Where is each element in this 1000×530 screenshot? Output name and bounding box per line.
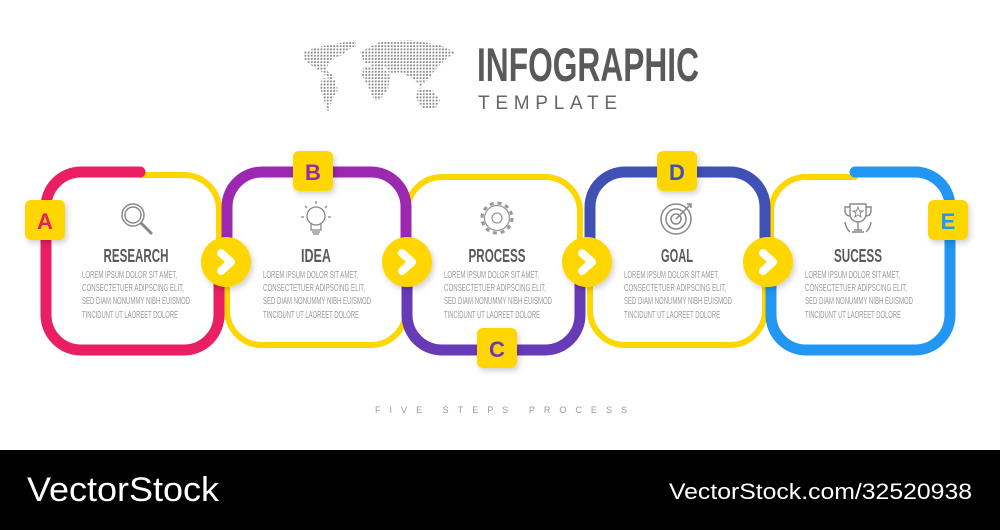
footer bar (0, 450, 1000, 530)
badge: A (25, 200, 65, 240)
text block: goal: GOAL (661, 246, 693, 266)
badge: E: E (941, 209, 955, 234)
panel: step frames (46, 172, 950, 350)
badge: C: C (489, 337, 505, 362)
badge: A: A (37, 209, 53, 234)
badge: C (477, 328, 517, 368)
text block: idea: IDEA (301, 246, 331, 266)
footer url: VectorStock.com/32520938 (669, 479, 972, 504)
text block: research (82, 246, 190, 321)
arrow: B to C (382, 237, 432, 287)
text block: research: SED DIAM NONUMMY NIBH EUISMOD (82, 296, 190, 307)
icon: gear (482, 203, 512, 233)
title: INFOGRAPHIC (477, 38, 699, 91)
icon: dotted world map (303, 40, 455, 112)
badge: D (657, 151, 697, 191)
text block: process (444, 246, 552, 321)
icon: target (661, 204, 691, 234)
arrow: D to E (743, 237, 793, 287)
text block: idea: CONSECTETUER ADIPSCING ELIT, (263, 283, 365, 294)
text block: sucess: TINCIDUNT UT LAOREET DOLORE (805, 310, 901, 321)
text block: sucess: SUCESS (834, 246, 882, 266)
text block: process: PROCESS (468, 246, 526, 266)
badge: B: B (305, 160, 321, 185)
text block: goal (624, 246, 732, 321)
icon: magnifier (122, 204, 152, 234)
text block: goal: LOREM IPSUM DOLOR SIT AMET, (624, 270, 719, 281)
arrow: C to D (562, 237, 612, 287)
text block: goal: CONSECTETUER ADIPSCING ELIT, (624, 283, 726, 294)
text block: idea: LOREM IPSUM DOLOR SIT AMET, (263, 270, 358, 281)
text block: sucess: CONSECTETUER ADIPSCING ELIT, (805, 283, 907, 294)
text block: process: TINCIDUNT UT LAOREET DOLORE (444, 310, 540, 321)
text block: research: LOREM IPSUM DOLOR SIT AMET, (82, 270, 177, 281)
caption: FIVE STEPS PROCESS (375, 405, 627, 415)
text block: idea (263, 246, 371, 321)
text block: goal: TINCIDUNT UT LAOREET DOLORE (624, 310, 720, 321)
text block: idea: TINCIDUNT UT LAOREET DOLORE (263, 310, 359, 321)
text block: sucess: SED DIAM NONUMMY NIBH EUISMOD (805, 296, 913, 307)
text block: idea: SED DIAM NONUMMY NIBH EUISMOD (263, 296, 371, 307)
icon: light bulb (301, 201, 331, 234)
text block: goal: SED DIAM NONUMMY NIBH EUISMOD (624, 296, 732, 307)
text block: process: LOREM IPSUM DOLOR SIT AMET, (444, 270, 539, 281)
badge: E (928, 200, 968, 240)
title (477, 38, 699, 114)
text block: research: TINCIDUNT UT LAOREET DOLORE (82, 310, 178, 321)
text block: research: RESEARCH (104, 246, 168, 266)
badge: B (293, 151, 333, 191)
text block: process: SED DIAM NONUMMY NIBH EUISMOD (444, 296, 552, 307)
text block: process: CONSECTETUER ADIPSCING ELIT, (444, 283, 546, 294)
text block: research: CONSECTETUER ADIPSCING ELIT, (82, 283, 184, 294)
subtitle: TEMPLATE (478, 93, 626, 114)
text block: sucess: LOREM IPSUM DOLOR SIT AMET, (805, 270, 900, 281)
icon: trophy (845, 204, 871, 232)
text block: sucess (805, 246, 913, 321)
badge: D: D (669, 160, 685, 185)
arrow: A to B (201, 237, 251, 287)
footer logo: VectorStock (27, 471, 220, 509)
